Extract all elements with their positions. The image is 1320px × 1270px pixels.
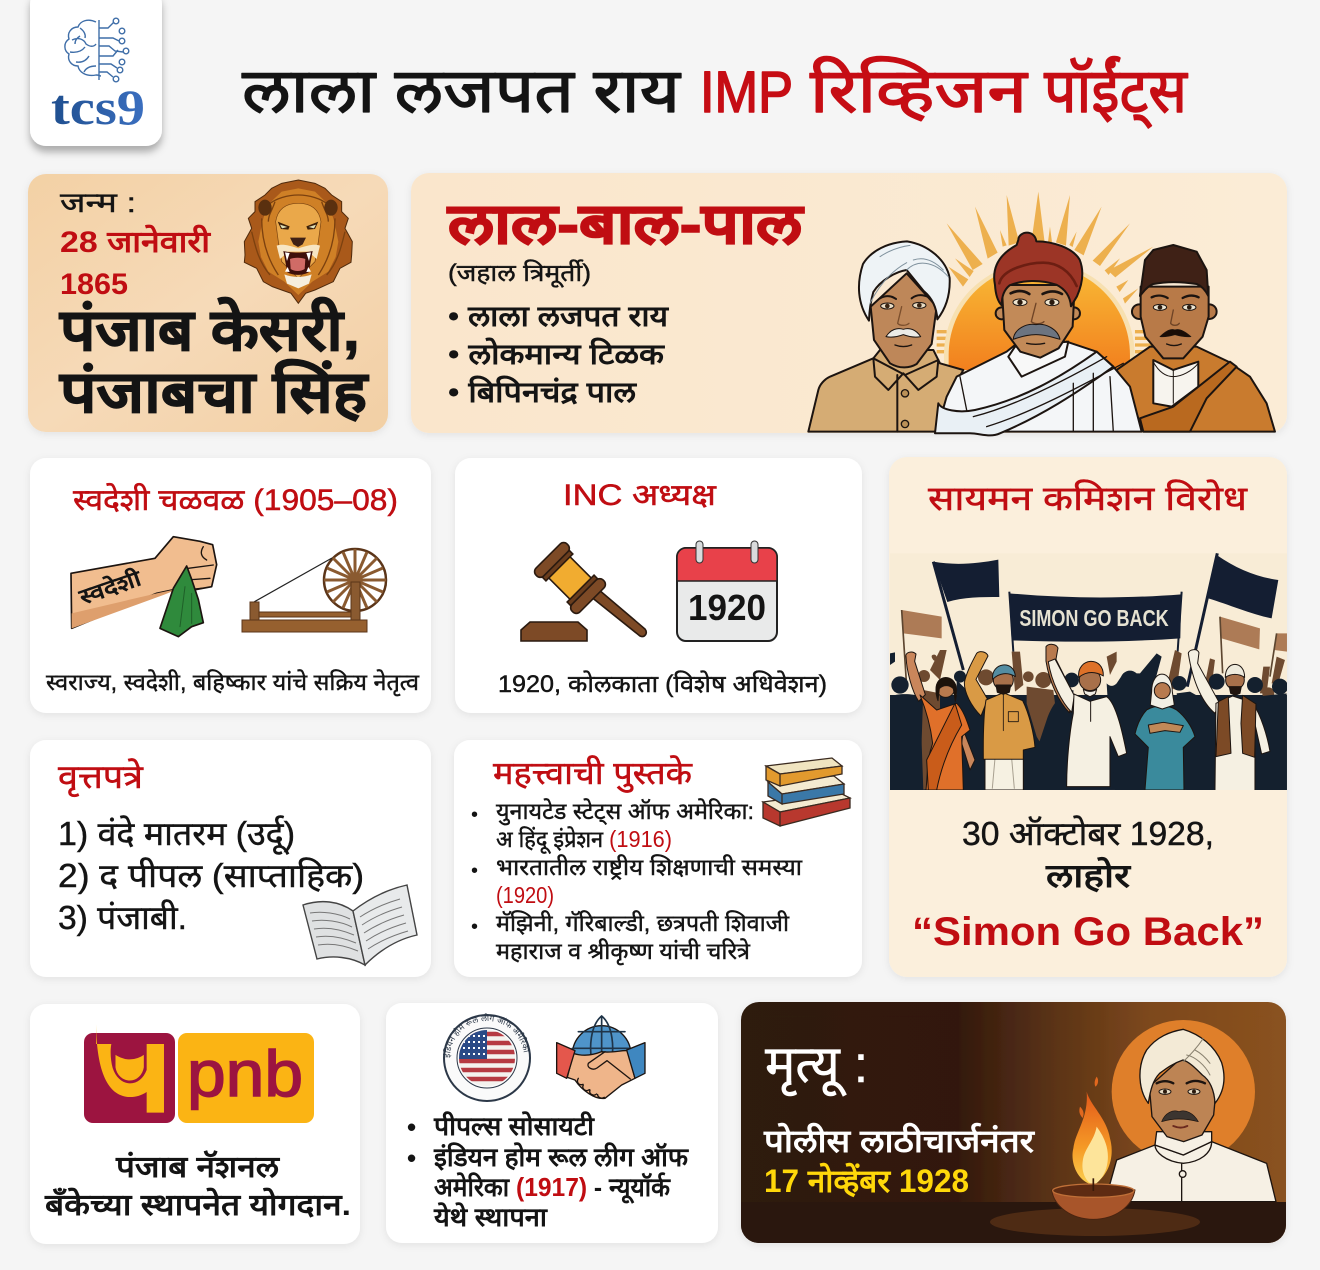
book list: भारतातील राष्ट्रीय शिक्षणाची समस्या: [496, 854, 803, 880]
title: पॉईंट्स: [1044, 56, 1188, 129]
illustration: protest crowd with black flags: [890, 553, 1288, 791]
book list: (1920): [496, 882, 554, 908]
description: स्वराज्य, स्वदेशी, बहिष्कार यांचे सक्रिय नेतृत्व: [46, 669, 420, 697]
organisations list: पीपल्स सोसायटी: [433, 1111, 595, 1141]
book list: •: [471, 804, 478, 826]
list of three leaders: [448, 301, 669, 409]
banner: SIMON GO BACK: [1019, 605, 1169, 631]
organisations list: •: [407, 1112, 416, 1142]
icon: USA seal: [443, 1013, 531, 1102]
icon: pnb logo: [84, 1024, 314, 1123]
caption: बँकेच्या स्थापनेत योगदान.: [44, 1187, 351, 1222]
cause and date: पोलीस लाठीचार्जनंतर: [763, 1122, 1036, 1159]
icon: pnb logo: pnb: [187, 1037, 303, 1110]
banner: [1009, 592, 1182, 652]
heading: स्वदेशी चळवळ (1905–08): [73, 483, 398, 517]
main heading: पंजाबचा सिंह: [59, 359, 369, 425]
organisations list: अमेरिका (1917) - न्यूयॉर्क: [434, 1172, 671, 1204]
man in yellow kurta: [964, 652, 1035, 790]
title: रिव्हिजन: [810, 56, 1029, 126]
list of three leaders: • लाला लजपत राय: [448, 301, 669, 333]
title: IMP: [700, 60, 793, 125]
sun rays: [937, 192, 1153, 353]
icon: calendar 1920: 1920: [688, 587, 766, 628]
heading: death: मृत्यू :: [765, 1036, 868, 1097]
organisations list: [407, 1111, 689, 1232]
title: [242, 56, 1188, 129]
book list: युनायटेड स्टेट्स ऑफ अमेरिका:: [496, 798, 754, 826]
panel: Lal Bal Pal: [411, 173, 1287, 435]
icon: charkha spinning wheel: [242, 549, 386, 632]
organisations list: येथे स्थापना: [433, 1202, 548, 1232]
icon: open book: [303, 885, 417, 965]
birth date: 28 जानेवारी: [60, 224, 211, 259]
newspaper list: 1) वंदे मातरम (उर्दू): [58, 815, 295, 855]
subtitle: (जहाल त्रिमूर्ती): [448, 259, 591, 288]
caption: [44, 1150, 351, 1222]
leader centre: red cap and white shawl: [935, 233, 1142, 435]
panel: INC president: [455, 458, 862, 713]
panel: death: [741, 1002, 1286, 1243]
list of three leaders: • बिपिनचंद्र पाल: [448, 375, 638, 409]
newspaper list: [58, 815, 364, 936]
panel: newspapers: [30, 740, 431, 977]
man in brown waistcoat: [1188, 650, 1270, 791]
cause and date: [763, 1122, 1036, 1199]
heading: वृत्तपत्रे: [58, 758, 144, 797]
main heading: पंजाब केसरी,: [59, 297, 360, 363]
icon: USA seal: इंडियन होम रूल लीग ऑफ अमेरिका: [443, 1013, 528, 1058]
sun disc: [944, 262, 1135, 370]
birth date: 1865: [60, 268, 128, 301]
book list: •: [471, 916, 478, 938]
icon: stack of books: [763, 758, 850, 826]
logo card: tcs9: [30, 0, 162, 146]
woman in teal: [1135, 674, 1195, 790]
icon: globe handshake: [557, 1016, 645, 1099]
black flags: [933, 555, 1278, 618]
panel: organisations founded: [386, 1003, 718, 1246]
arm label: स्वदेशी: [75, 564, 146, 610]
icon: fist with green cloth: [71, 537, 217, 637]
organisations list: •: [407, 1143, 416, 1173]
solid crowd base: [890, 695, 1287, 790]
icon: circuit brain: [65, 18, 129, 82]
birth date: [60, 224, 211, 301]
date and place: लाहोर: [1045, 856, 1132, 894]
icon: gavel: [521, 541, 646, 641]
icon: roaring lion: [244, 180, 352, 303]
date and place: [962, 815, 1214, 894]
newspaper list: 3) पंजाबी.: [58, 899, 187, 936]
newspaper list: 2) द पीपल (साप्ताहिक): [58, 857, 364, 894]
dark crowd silhouettes: [890, 652, 1288, 790]
book list: मॅझिनी, गॅरिबाल्डी, छत्रपती शिवाजी: [496, 910, 790, 936]
title: लाला लजपत राय: [242, 57, 681, 126]
cause and date: 17 नोव्हेंबर 1928: [764, 1162, 969, 1199]
background brown marchers: [918, 650, 1285, 790]
panel: Simon Commission protest: [889, 457, 1288, 977]
logo wordmark: tcs9: [51, 79, 145, 135]
heading: Lal Bal Pal: लाल-बाल-पाल: [447, 192, 804, 255]
leader right: dark cap and orange shawl: [1117, 245, 1275, 432]
illustration: three leaders with rising sun: [808, 192, 1275, 435]
main heading: [59, 297, 369, 425]
panel: Punjab National Bank: [30, 1004, 360, 1244]
tan flags: [902, 610, 1287, 652]
description: 1920, कोलकाता (विशेष अधिवेशन): [498, 670, 827, 698]
list of three leaders: • लोकमान्य टिळक: [448, 337, 666, 371]
woman in orange saree: [906, 652, 975, 790]
leader left: white turban: [808, 241, 963, 432]
book list: [471, 798, 803, 966]
organisations list: इंडियन होम रूल लीग ऑफ: [433, 1142, 689, 1172]
illustration: Lajpat Rai portrait with lamp: [741, 1020, 1286, 1243]
panel: birth and Punjab Kesari: [28, 174, 388, 432]
book list: महाराज व श्रीकृष्ण यांची चरित्रे: [496, 938, 751, 966]
heading: INC अध्यक्ष: [563, 479, 717, 512]
heading: सायमन कमिशन विरोध: [928, 479, 1248, 518]
date and place: 30 ऑक्टोबर 1928,: [962, 815, 1214, 852]
slogan: “Simon Go Back”: [912, 910, 1264, 954]
man in white kurta: [1046, 644, 1127, 787]
caption: पंजाब नॅशनल: [115, 1150, 280, 1184]
heading: महत्त्वाची पुस्तके: [493, 755, 694, 793]
book list: •: [471, 860, 478, 882]
panel: important books: [454, 740, 862, 977]
icon: calendar 1920: [677, 541, 777, 641]
birth label: जन्म :: [60, 187, 136, 218]
panel: Swadeshi movement: [30, 458, 431, 713]
book list: अ हिंदू इंप्रेशन (1916): [496, 826, 672, 854]
